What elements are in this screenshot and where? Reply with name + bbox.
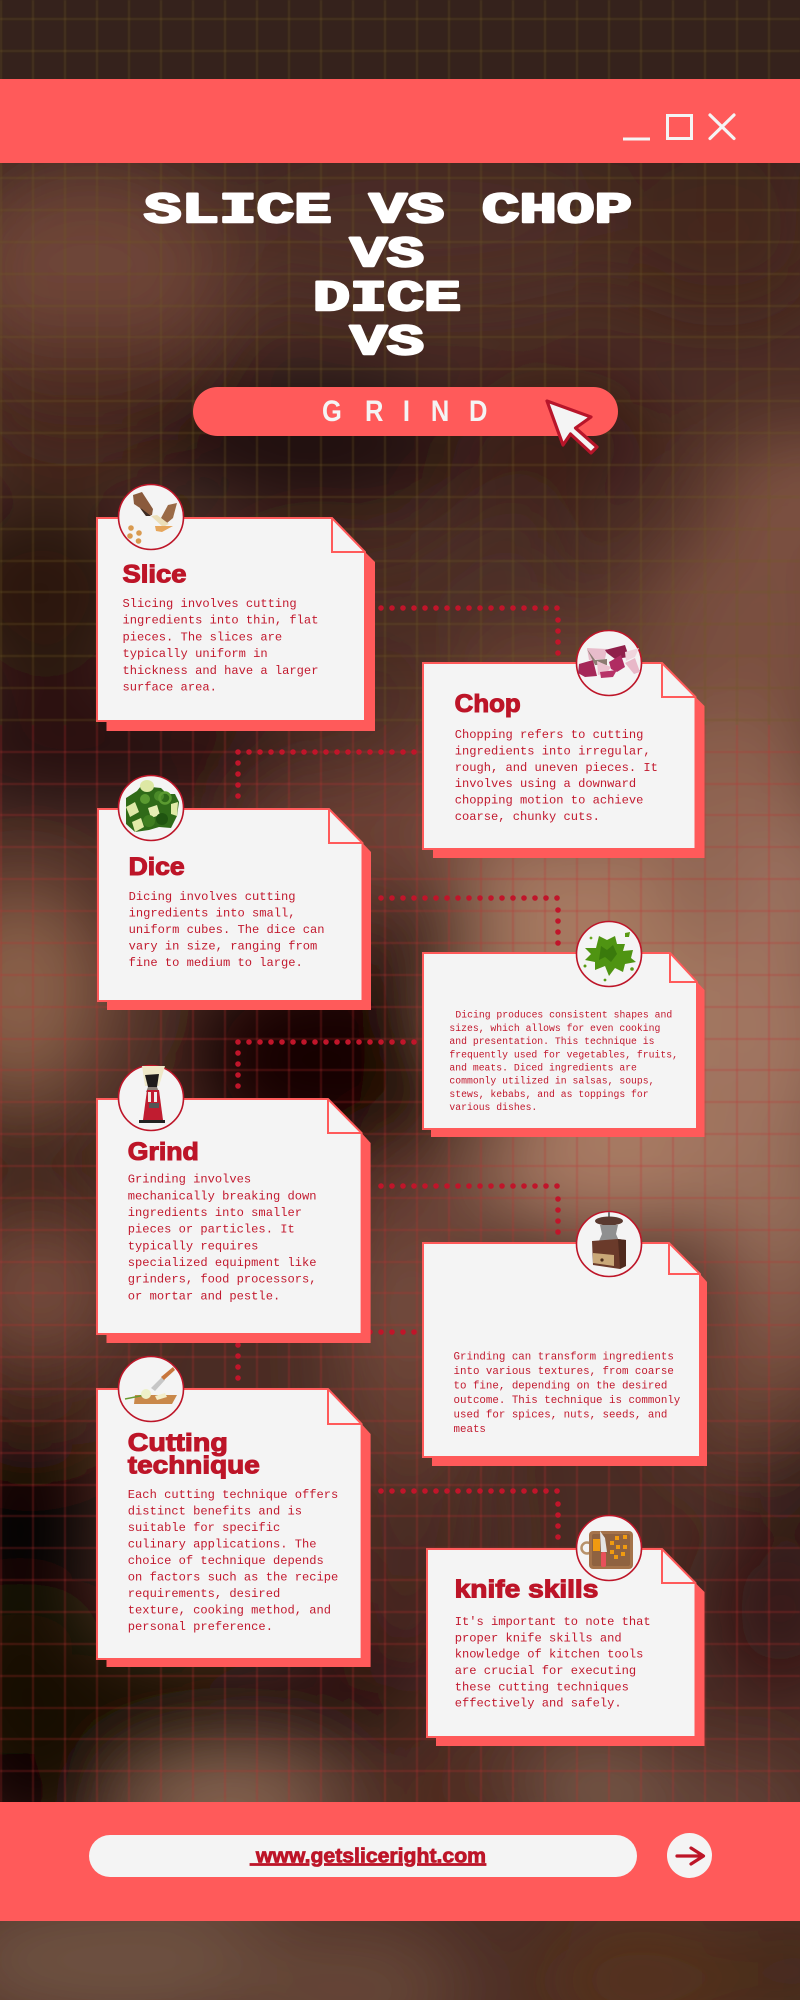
body text: outcome. This technique is commonly [454, 1395, 681, 1407]
body text: suitable for specific [128, 1521, 280, 1535]
body text: choice of technique depends [128, 1554, 324, 1568]
icon: chopped red onion [576, 630, 642, 696]
body text: Chopping refers to cutting [455, 728, 643, 742]
title: VS [350, 230, 424, 279]
body text: Grinding can transform ingredients [454, 1351, 674, 1363]
body text: grinders, food processors, [128, 1273, 317, 1287]
body text: frequently used for vegetables, fruits, [449, 1049, 678, 1060]
body text: Dicing produces consistent shapes and [455, 1010, 672, 1021]
body text: pieces. The slices are [122, 630, 282, 644]
body text: knowledge of kitchen tools [455, 1648, 643, 1662]
title: DICE [313, 274, 461, 323]
icon: hands slicing [118, 484, 184, 550]
body text: into various textures, from coarse [454, 1366, 674, 1378]
body text: meats [454, 1424, 486, 1436]
body text: commonly utilized in salsas, soups, [449, 1076, 655, 1087]
card shape [97, 1389, 371, 1667]
body text: on factors such as the recipe [128, 1570, 338, 1584]
heading: knife skills [455, 1576, 598, 1604]
panel: cutting technique [97, 1356, 371, 1667]
icon: arrow button [667, 1833, 712, 1878]
heading: Cutting [128, 1429, 228, 1457]
panel: knife skills [427, 1516, 704, 1746]
subtitle pill: grind: GRIND [322, 394, 487, 427]
dotted connectors [238, 608, 558, 1538]
body text: and meats. Diced ingredients are [449, 1062, 637, 1074]
icon: maximize [668, 116, 692, 138]
heading: Chop [455, 690, 521, 718]
body text: to fine, depending on the desired [454, 1380, 667, 1392]
body text: distinct benefits and is [128, 1504, 302, 1518]
body text: typically uniform in [122, 647, 268, 661]
subtitle pill: grind [193, 387, 618, 436]
panel: dicing detail [423, 922, 704, 1137]
body text: culinary applications. The [128, 1538, 317, 1552]
body text: stews, kebabs, and as toppings for [449, 1089, 649, 1100]
title: SLICE VS CHOP [144, 186, 632, 235]
body text: Grinding involves [128, 1173, 251, 1187]
body text: used for spices, nuts, seeds, and [454, 1410, 667, 1422]
url pill: www.getsliceright.com [250, 1846, 486, 1868]
body text: Each cutting technique offers [128, 1488, 338, 1502]
body text: vary in size, ranging from [129, 940, 317, 954]
card shape [423, 663, 704, 858]
body text: thickness and have a larger [122, 664, 318, 678]
panel: slice [97, 484, 375, 731]
icon: minimize [623, 138, 650, 140]
card shape [97, 1099, 371, 1343]
icon: electric grinder [118, 1066, 184, 1130]
icon: knife on cutting board [118, 1356, 184, 1422]
icon: chopped parsley [576, 922, 642, 986]
heading: Dice [129, 853, 185, 881]
body text: and presentation. This technique is [449, 1036, 655, 1047]
body text: coarse, chunky cuts. [455, 810, 600, 824]
body text: Dicing involves cutting [129, 890, 296, 904]
panel: chop [423, 630, 704, 858]
card shape [423, 953, 704, 1137]
top window bar [0, 79, 800, 163]
body text: texture, cooking method, and [128, 1604, 331, 1618]
body text: fine to medium to large. [129, 956, 303, 970]
icon: knife and board with carrot cubes [576, 1516, 642, 1580]
body text: effectively and safely. [455, 1697, 622, 1711]
body text: sizes, which allows for even cooking [449, 1023, 661, 1034]
body text: specialized equipment like [128, 1256, 317, 1270]
body text: or mortar and pestle. [128, 1289, 280, 1303]
icon: manual coffee grinder [576, 1212, 642, 1276]
body text: ingredients into thin, flat [122, 614, 318, 628]
card shape [97, 518, 375, 731]
card shape [427, 1549, 704, 1746]
body text: various dishes. [449, 1102, 537, 1113]
url pill [89, 1835, 637, 1877]
body text: ingredients into small, [129, 906, 296, 920]
heading: technique [128, 1452, 260, 1480]
body text: are crucial for executing [455, 1664, 636, 1678]
heading: Grind [128, 1138, 199, 1166]
body text: these cutting techniques [455, 1680, 629, 1694]
icon: mouse cursor [547, 401, 597, 453]
body text: surface area. [122, 680, 217, 694]
body text: Slicing involves cutting [122, 597, 297, 611]
panel: grind [97, 1066, 371, 1343]
card shape [98, 809, 371, 1010]
icon: diced green onion [118, 776, 184, 840]
body text: chopping motion to achieve [455, 794, 643, 808]
body text: involves using a downward [455, 777, 636, 791]
panel: grinding detail [423, 1212, 707, 1466]
body text: pieces or particles. It [128, 1223, 295, 1237]
footer bar [0, 1802, 800, 1921]
body text: uniform cubes. The dice can [129, 923, 325, 937]
body text: rough, and uneven pieces. It [455, 761, 658, 775]
panel: dice [98, 776, 371, 1010]
body text: ingredients into irregular, [455, 744, 651, 758]
body text: It's important to note that [455, 1615, 651, 1629]
body text: proper knife skills and [455, 1631, 622, 1645]
icon: close [710, 115, 734, 138]
heading: Slice [122, 561, 187, 589]
title: VS [350, 318, 424, 367]
body text: ingredients into smaller [128, 1206, 302, 1220]
body text: requirements, desired [128, 1587, 280, 1601]
card shape [423, 1243, 707, 1466]
title [144, 186, 632, 367]
body text: typically requires [128, 1239, 258, 1253]
body text: personal preference. [128, 1620, 273, 1634]
body text: mechanically breaking down [128, 1189, 317, 1203]
